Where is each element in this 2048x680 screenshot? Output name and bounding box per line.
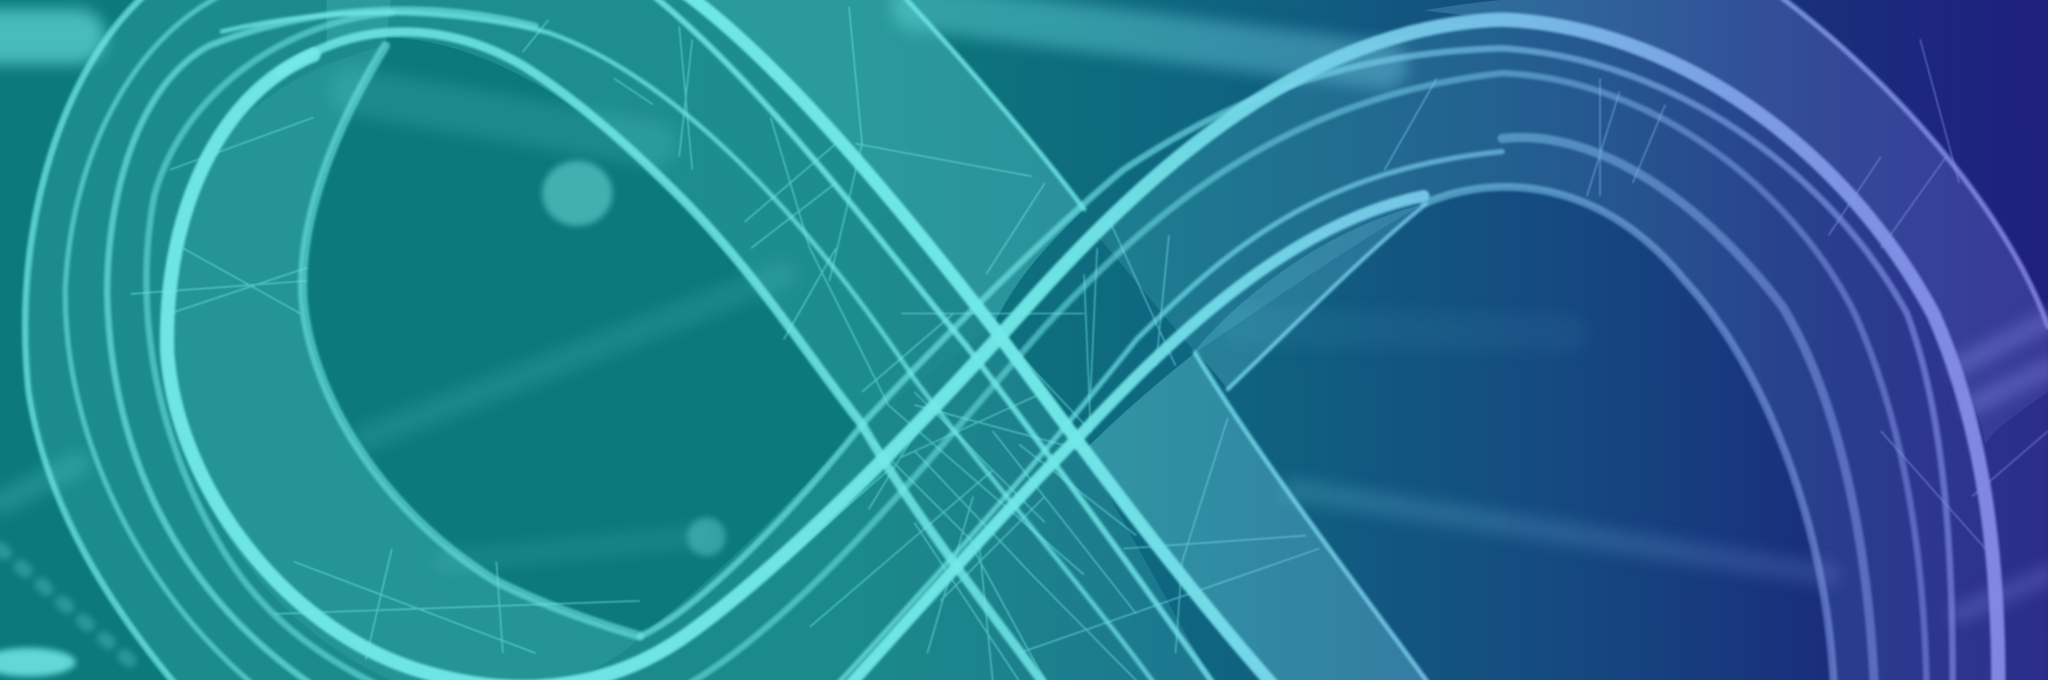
ribbon: crossing lower band [640, 327, 1215, 680]
ribbon: left loop whole [29, 0, 653, 680]
ribbon: small fin by right hole [1195, 204, 1426, 389]
strand: descending lower right edge [1195, 353, 1430, 680]
strand: top arc outer [222, 13, 1156, 680]
strand: right outer edge [1776, 0, 2048, 327]
dotted trail: bottom left [0, 549, 144, 673]
strand: top arc of left hole [281, 32, 1045, 680]
ribbon: right loop upper band highlight [1424, 0, 2048, 444]
strand: right third rising [836, 152, 1502, 680]
strand: parallel descending [650, 0, 1215, 680]
ribbon: right loop inner band [1097, 20, 1998, 680]
ribbon: upper-left crossing band [327, 0, 993, 425]
ribbon: upper descending band [686, 0, 1084, 327]
strand: bright descending main [686, 0, 1273, 680]
strand: fin edge [1228, 204, 1426, 389]
strand: right second rising [686, 73, 1927, 680]
strand: descending upper right edge [901, 0, 1084, 209]
strand: hole inner edge, left back [303, 46, 640, 636]
strand: left outer ring [25, 0, 176, 680]
strand: left second ring [65, 0, 255, 680]
strand: left third ring [107, 10, 536, 680]
orb: upper left [542, 161, 613, 226]
ribbon: lower descending band [1084, 353, 1430, 680]
ribbon: left loop back face [164, 46, 640, 680]
strand: left fourth ring [146, 13, 392, 680]
blob: bottom left [0, 648, 76, 677]
strand: right hole edge [1424, 187, 1834, 680]
orb: lower middle [687, 517, 726, 556]
strand: right loop ring short piece [1502, 137, 1874, 680]
strand: rising from left hole [640, 48, 1953, 680]
strand: right rising bright [849, 196, 1424, 680]
ribbon: right loop upper band [1424, 0, 2048, 680]
